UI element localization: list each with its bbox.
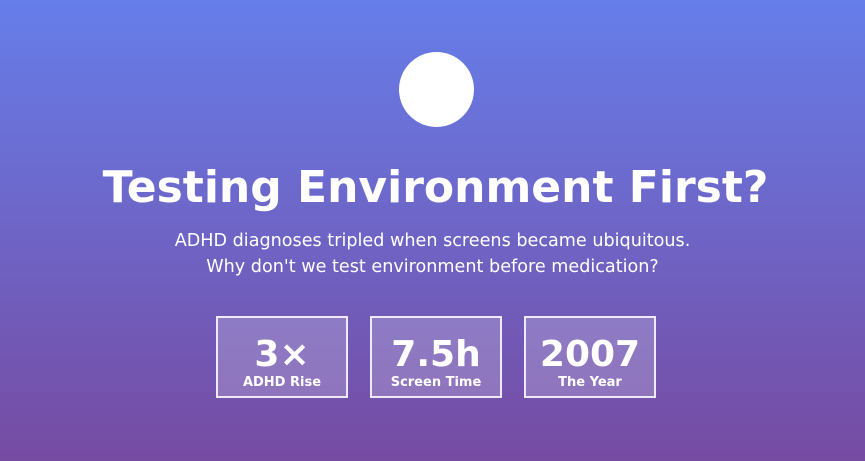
- stat: screen time: [370, 316, 502, 398]
- subtitle text: [174, 231, 690, 277]
- stat: ADHD rise: ADHD Rise: [243, 375, 321, 390]
- stat: year: The Year: [558, 375, 622, 390]
- subtitle text: Why don't we test environment before medication?: [206, 257, 659, 277]
- stat: year: [524, 316, 656, 398]
- stat: ADHD rise: 3×: [254, 334, 310, 375]
- title: Testing Environment First?: [103, 162, 768, 213]
- subtitle text: ADHD diagnoses tripled when screens became ubiquitous.: [175, 231, 690, 251]
- stat: screen time: Screen Time: [391, 375, 481, 390]
- stat: ADHD rise: [216, 316, 348, 398]
- stat: year: 2007: [540, 334, 640, 375]
- stat: screen time: 7.5h: [391, 334, 481, 375]
- icon: circle: [399, 52, 474, 127]
